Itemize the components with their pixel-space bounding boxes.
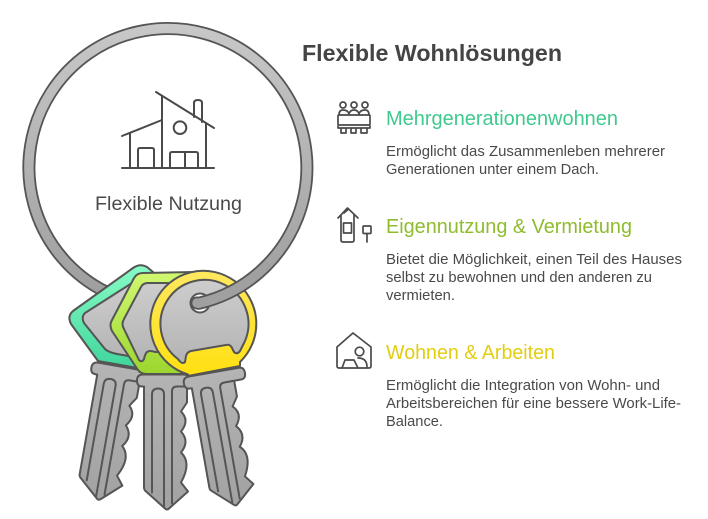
text: Mehrgenerationenwohnen: Ermöglicht das Zusammenleben mehrerer <box>386 144 665 160</box>
right key blade <box>183 367 267 511</box>
text: Mehrgenerationenwohnen <box>386 144 665 178</box>
text: Wohnen & Arbeiten: Arbeitsbereichen für eine bessere Work-Life- <box>386 396 681 412</box>
heading: Eigennutzung & Vermietung: Eigennutzung & Vermietung <box>386 216 632 238</box>
key ring front end <box>190 264 268 310</box>
text: Wohnen & Arbeiten <box>386 378 681 430</box>
text: Mehrgenerationenwohnen: Generationen unter einem Dach. <box>386 162 599 178</box>
ring label: Flexible Nutzung <box>95 194 242 215</box>
left key blade <box>69 362 144 504</box>
heading: Wohnen & Arbeiten: Wohnen & Arbeiten <box>386 342 555 364</box>
teal key head <box>69 265 160 372</box>
text: Eigennutzung & Vermietung: Bietet die Möglichkeit, einen Teil des Hauses <box>386 252 682 268</box>
text: Eigennutzung & Vermietung: vermieten. <box>386 288 455 304</box>
icon: house on ring <box>122 92 214 168</box>
text: Wohnen & Arbeiten: Balance. <box>386 414 443 430</box>
text: Eigennutzung & Vermietung: selbst zu bewohnen und den anderen zu <box>386 270 652 286</box>
icon: people at table <box>338 102 370 133</box>
heading: Mehrgenerationenwohnen: Mehrgenerationenwohnen <box>386 108 618 130</box>
lime key head <box>110 272 195 374</box>
icon: home office <box>337 333 371 368</box>
icon: house and sign <box>338 208 371 242</box>
middle key blade <box>137 374 189 510</box>
key ring back arc <box>29 29 307 292</box>
text: Eigennutzung & Vermietung <box>386 252 682 304</box>
text: Wohnen & Arbeiten: Ermöglicht die Integration von Wohn- und <box>386 378 660 394</box>
yellow key head <box>150 271 256 376</box>
title: Flexible Wohnlösungen <box>302 40 562 66</box>
